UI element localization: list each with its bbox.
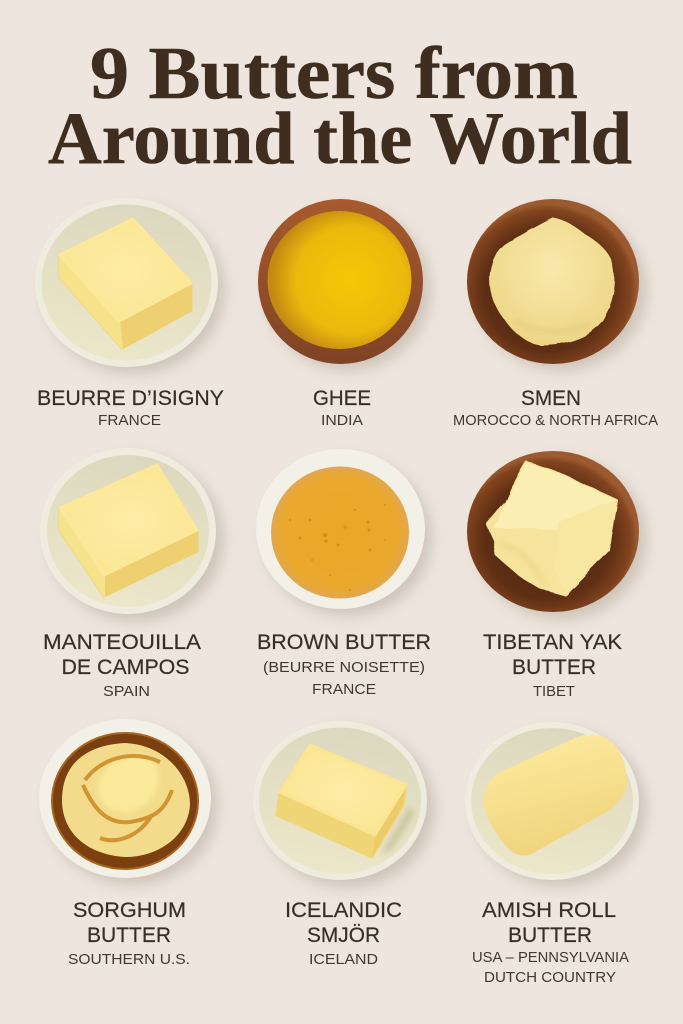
name: BUTTER [508, 923, 592, 947]
name: DE CAMPOS [62, 655, 190, 679]
icon: butter roll on cream plate [465, 722, 647, 887]
name [482, 898, 616, 947]
panel: Beurre d'Isigny [35, 198, 225, 429]
name: BROWN BUTTER [257, 630, 431, 654]
icon: butter block on cream plate [253, 721, 435, 888]
origin: MOROCCO & NORTH AFRICA [453, 412, 658, 429]
name: GHEE [313, 386, 371, 410]
name: SMEN [521, 386, 581, 410]
panel: Brown Butter [256, 449, 432, 698]
name: BUTTER [512, 655, 596, 679]
title: Around the World [48, 98, 632, 180]
icon: smen in wooden bowl [467, 199, 647, 371]
name: BEURRE D’ISIGNY [37, 386, 224, 410]
title [48, 33, 632, 180]
panel: Ghee [258, 199, 431, 429]
origin [472, 949, 629, 986]
panel: Smen [453, 199, 658, 429]
origin: TIBET [533, 683, 575, 700]
panel: Amish Roll Butter [465, 722, 647, 986]
panel: Sorghum Butter [39, 719, 218, 968]
name: BUTTER [87, 923, 171, 947]
origin: DUTCH COUNTRY [484, 969, 616, 986]
icon: butter block on cream plate [35, 198, 225, 374]
panel: Icelandic Smjor [253, 721, 435, 968]
name: MANTEOUILLA [43, 630, 202, 654]
origin: USA – PENNSYLVANIA [472, 949, 629, 966]
name: AMISH ROLL [482, 898, 616, 922]
name: TIBETAN YAK [483, 630, 623, 654]
origin: SPAIN [103, 683, 150, 700]
icon: yak butter in wooden bowl [467, 451, 647, 620]
name: SORGHUM [73, 898, 186, 922]
panel: Manteouilla de Campos [40, 448, 224, 700]
name [73, 898, 186, 947]
origin: SOUTHERN U.S. [68, 951, 190, 968]
descriptor: (BEURRE NOISETTE) [263, 659, 425, 676]
origin: FRANCE [312, 681, 376, 698]
title: 9 Butters from [90, 33, 578, 115]
name: ICELANDIC [285, 898, 402, 922]
name [285, 898, 402, 947]
name [483, 630, 623, 679]
origin: INDIA [321, 412, 363, 429]
specks [289, 504, 386, 591]
panel: Tibetan Yak Butter [467, 451, 647, 700]
origin: ICELAND [309, 951, 378, 968]
name: SMJÖR [307, 923, 380, 947]
icon: ghee in wooden bowl [258, 199, 431, 371]
icon: brown butter in white bowl [256, 449, 432, 616]
icon: butter block on cream plate [40, 448, 224, 622]
icon: sorghum butter in white bowl [39, 719, 218, 885]
origin: FRANCE [98, 412, 161, 429]
name [43, 630, 202, 679]
